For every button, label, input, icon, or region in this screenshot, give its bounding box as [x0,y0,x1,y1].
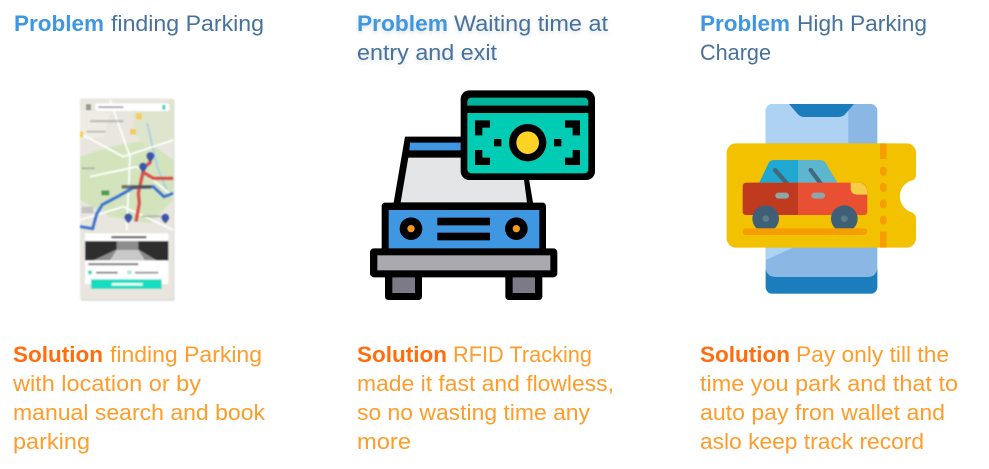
column 3 problem heading: Charge [700,40,771,65]
bumper [370,248,557,277]
column 3 problem heading: High Parking [797,11,927,36]
column 3 solution text: Solution [700,342,790,367]
column 1 solution text: Solution [13,342,103,367]
icon: phone with parking ticket [727,104,916,294]
column 2 problem heading: Waiting time at [454,11,608,36]
column 3 solution text: aslo keep track record [700,429,924,454]
windshield [393,137,534,208]
column 2 solution text: made it fast and flowless, [357,371,614,396]
select parking button [91,279,162,289]
search bar [86,103,169,111]
column 1 problem heading: Problem [14,11,104,36]
column 3 solution text [700,342,958,454]
car body [382,203,546,255]
column 2 problem heading: Problem [357,11,448,36]
ticket [727,143,916,248]
icon: car with banknote [370,90,595,300]
column 1 solution text [12,342,266,454]
phone map screenshot [80,98,174,301]
column 2 problem heading [357,11,608,65]
column 1 problem heading [14,11,264,36]
phone [766,104,877,294]
parking info card [85,233,168,284]
column 3 problem heading: Problem [700,11,790,36]
column 1 solution text: parking [13,429,90,454]
column 2 solution text: Solution [357,342,447,367]
column 2 solution text: more [357,429,411,454]
column 2 solution text [357,342,614,454]
column 2 problem heading: entry and exit [357,40,497,65]
wheels [385,272,542,300]
red car [743,160,867,235]
column 3 problem heading [700,11,927,65]
column 2 solution text: RFID Tracking [453,342,592,367]
banknote card [461,90,595,180]
column 3 solution text: Pay only till the [796,342,949,367]
column 3 solution text: auto pay fron wallet and [700,400,945,425]
column 1 solution text: manual search and book [13,400,266,425]
column 2 solution text: so no wasting time any [357,400,590,425]
column 1 solution text: finding Parking [110,342,262,367]
column 1 solution text: with location or by [12,371,201,396]
column 3 solution text: time you park and that to [700,371,958,396]
column 1 problem heading: finding Parking [111,11,264,36]
